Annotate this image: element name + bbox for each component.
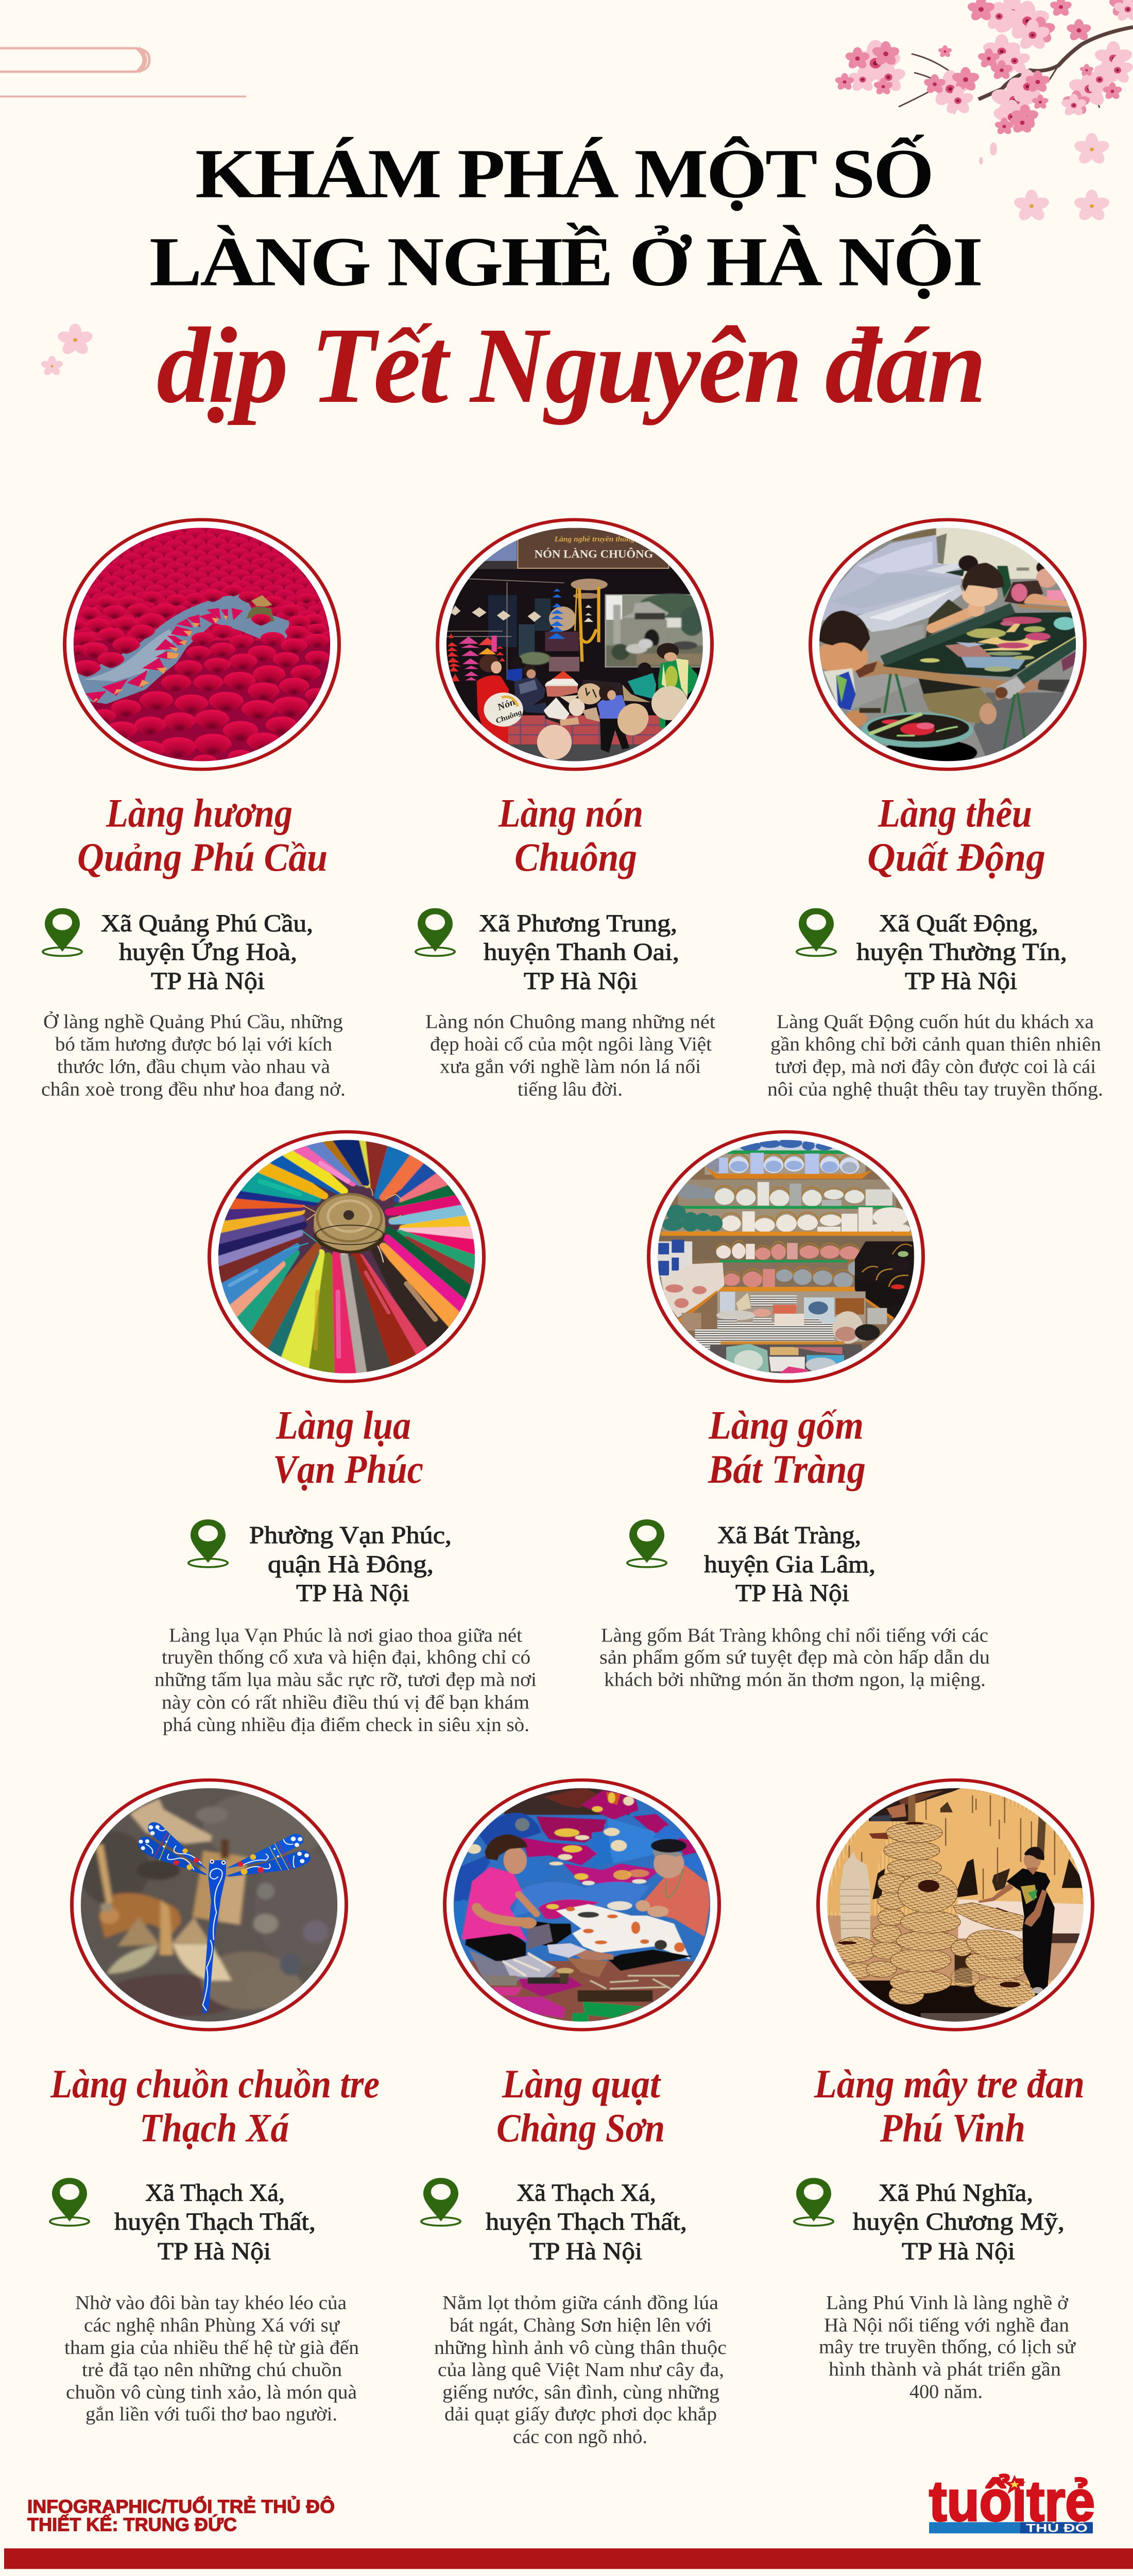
description: Làng lụa Vạn Phúc là nơi giao thoa giữa nét xyxy=(169,1624,522,1646)
icon: location pin xyxy=(627,1519,666,1567)
footer credits: THIẾT KẾ: TRUNG ĐỨC xyxy=(27,2514,237,2535)
address: Xã Thạch Xá, xyxy=(517,2179,656,2206)
description xyxy=(599,1624,990,1690)
description: những hình ảnh vô cùng thân thuộc xyxy=(434,2336,727,2359)
description: khách bởi những món ăn thơm ngon, lạ miệng. xyxy=(604,1668,986,1690)
icon: location pin xyxy=(43,908,82,956)
photo: conical hat shop: Làng nghề truyền thống xyxy=(554,535,635,544)
description: Nằm lọt thỏm giữa cánh đồng lúa xyxy=(442,2292,718,2313)
photo: conical hat shop: Chuông xyxy=(494,708,523,725)
address: TP Hà Nội xyxy=(151,968,265,994)
photo: incense bundles xyxy=(62,517,342,772)
address: Xã Bát Tràng, xyxy=(717,1522,861,1549)
heading xyxy=(498,791,643,879)
address xyxy=(101,910,313,994)
description: gắn liền với tuổi thơ bao người. xyxy=(85,2403,337,2425)
description xyxy=(434,2292,727,2447)
address: TP Hà Nội xyxy=(158,2238,271,2265)
panel: Làng chuồn chuồn tre Thạch Xá xyxy=(50,1777,380,2425)
icon: location pin xyxy=(797,908,836,956)
heading xyxy=(77,791,328,879)
decoration: top-left pill and rule xyxy=(0,48,246,96)
description xyxy=(819,2292,1076,2402)
address xyxy=(704,1522,876,1607)
description: đẹp hoài cổ của một ngôi làng Việt xyxy=(430,1033,712,1055)
footer credits xyxy=(27,2495,335,2535)
address: TP Hà Nội xyxy=(905,968,1017,994)
heading: Bát Tràng xyxy=(708,1447,866,1492)
heading: Làng mây tre đan xyxy=(814,2061,1085,2106)
heading: Chàng Sơn xyxy=(496,2106,665,2150)
description xyxy=(64,2292,359,2425)
address xyxy=(856,910,1067,994)
heading: Phú Vinh xyxy=(880,2106,1025,2150)
address: huyện Thanh Oai, xyxy=(484,939,679,965)
heading xyxy=(867,791,1045,879)
heading: Quất Động xyxy=(867,835,1045,879)
description: mây tre truyền thống, có lịch sử xyxy=(819,2335,1076,2358)
decoration: floating blossoms xyxy=(40,133,1111,377)
description: chuồn vô cùng tinh xảo, là món quà xyxy=(66,2381,357,2403)
address xyxy=(249,1522,452,1607)
address: TP Hà Nội xyxy=(902,2238,1015,2265)
description: Ở làng nghề Quảng Phú Cầu, những xyxy=(43,1010,343,1032)
description: xưa gắn với nghề làm nón lá nổi xyxy=(440,1055,701,1077)
heading: Làng hương xyxy=(106,791,293,836)
heading: Chuông xyxy=(514,835,637,879)
description xyxy=(425,1010,715,1100)
panel: Làng hương Quảng Phú Cầu xyxy=(41,517,346,1100)
address: Xã Quất Động, xyxy=(879,910,1038,937)
heading xyxy=(814,2061,1085,2150)
footer bar xyxy=(4,2548,1133,2569)
address: quận Hà Đông, xyxy=(268,1551,434,1578)
heading: Làng gốm xyxy=(708,1403,864,1448)
logo: Tuổi Trẻ Thủ Đô: tuổitrẻ xyxy=(929,2469,1095,2533)
description: bó tăm hương được bó lại với kích xyxy=(55,1033,332,1055)
description: của làng quê Việt Nam như cây đa, xyxy=(438,2359,724,2380)
description: nôi của nghệ thuật thêu tay truyền thống. xyxy=(767,1078,1103,1100)
description: chân xoè trong đều như hoa đang nở. xyxy=(41,1078,346,1100)
decoration: cherry blossom branch xyxy=(834,0,1133,164)
description: tiếng lâu đời. xyxy=(518,1078,623,1100)
address: huyện Gia Lâm, xyxy=(704,1551,876,1578)
panel: Làng gốm Bát Tràng xyxy=(599,1129,990,1690)
photo: bamboo dragonfly xyxy=(69,1777,349,2032)
heading: Làng quạt xyxy=(502,2061,661,2106)
description xyxy=(154,1624,537,1736)
photo: pottery shelves xyxy=(646,1129,926,1384)
heading: Làng nón xyxy=(498,791,643,836)
address: huyện Thạch Thất, xyxy=(114,2208,316,2235)
address: Xã Phú Nghĩa, xyxy=(879,2179,1033,2206)
description: tham gia của nhiều thế hệ từ già đến xyxy=(64,2336,359,2359)
address xyxy=(479,910,679,994)
address: TP Hà Nội xyxy=(529,2238,642,2265)
photo: colourful silk scarves xyxy=(207,1129,487,1384)
panel: Làng nón Chuông xyxy=(416,517,715,1100)
description: gần không chỉ bởi cảnh quan thiên nhiên xyxy=(770,1033,1101,1055)
heading: Làng chuồn chuồn tre xyxy=(50,2061,380,2106)
photo: conical hat shop xyxy=(435,517,715,772)
description: Làng gốm Bát Tràng không chỉ nổi tiếng với các xyxy=(601,1624,988,1646)
address: huyện Chương Mỹ, xyxy=(853,2208,1065,2235)
description: dải quạt giấy được phơi dọc khắp xyxy=(444,2403,717,2425)
heading: Làng thêu xyxy=(878,791,1032,836)
description: những tấm lụa màu sắc rực rỡ, tươi đẹp mà nơi xyxy=(154,1668,537,1690)
address xyxy=(853,2179,1065,2265)
heading: Làng lụa xyxy=(276,1403,411,1448)
description: tươi đẹp, mà nơi đây còn được coi là cái xyxy=(775,1055,1096,1077)
address xyxy=(114,2179,316,2265)
panel: Làng quạt Chàng Sơn xyxy=(421,1777,727,2447)
description: sản phẩm gốm sứ tuyệt đẹp mà còn hấp dẫn du xyxy=(599,1646,990,1668)
heading: Thạch Xá xyxy=(140,2106,289,2150)
description: Làng Quất Động cuốn hút du khách xa xyxy=(777,1010,1094,1032)
description: Làng Phú Vinh là làng nghề ở xyxy=(826,2292,1069,2313)
description: bát ngát, Chàng Sơn hiện lên với xyxy=(450,2314,712,2336)
description: các nghệ nhân Phùng Xá với sự xyxy=(84,2314,340,2336)
description: trẻ đã tạo nên những chú chuồn xyxy=(82,2359,342,2380)
description: Hà Nội nổi tiếng với nghề đan xyxy=(824,2314,1069,2336)
description: thước lớn, đầu chụm vào nhau và xyxy=(57,1055,330,1077)
icon: location pin xyxy=(416,908,455,956)
footer credits: INFOGRAPHIC/TUỔI TRẺ THỦ ĐÔ xyxy=(27,2495,335,2517)
panel: Làng thêu Quất Động xyxy=(767,517,1103,1100)
title: LÀNG NGHỀ Ở HÀ NỘI xyxy=(149,222,981,301)
description: các con ngõ nhỏ. xyxy=(513,2426,647,2447)
heading xyxy=(496,2061,665,2150)
description xyxy=(767,1010,1103,1100)
title: KHÁM PHÁ MỘT SỐ xyxy=(195,134,932,213)
description: Nhờ vào đôi bàn tay khéo léo của xyxy=(75,2292,347,2313)
address: Xã Quảng Phú Cầu, xyxy=(101,910,313,937)
photo: fan makers xyxy=(442,1777,722,2032)
photo: embroidery frames xyxy=(808,517,1088,772)
photo: rattan baskets xyxy=(815,1777,1095,2034)
photo: conical hat shop: Nón xyxy=(495,697,517,713)
address: TP Hà Nội xyxy=(735,1580,849,1607)
icon: location pin xyxy=(421,2178,460,2226)
heading: Quảng Phú Cầu xyxy=(77,835,328,879)
address: Xã Thạch Xá, xyxy=(145,2179,285,2206)
description: giếng nước, sân đình, cùng những xyxy=(442,2381,719,2403)
address: huyện Thạch Thất, xyxy=(486,2208,687,2235)
address: Xã Phương Trung, xyxy=(479,910,677,937)
description: này còn có rất nhiều điều thú vị để bạn khám xyxy=(162,1691,529,1713)
address: TP Hà Nội xyxy=(524,968,638,994)
icon: location pin xyxy=(188,1519,228,1567)
description: hình thành và phát triển gần xyxy=(829,2358,1061,2380)
logo: Tuổi Trẻ Thủ Đô: THỦ ĐÔ xyxy=(1026,2522,1088,2534)
heading xyxy=(50,2061,380,2150)
photo: conical hat shop: NÓN LÀNG CHUÔNG xyxy=(535,548,653,561)
description: truyền thống cổ xưa và hiện đại, không chỉ có xyxy=(162,1646,530,1668)
description: 400 năm. xyxy=(909,2380,983,2402)
address: TP Hà Nội xyxy=(296,1580,409,1607)
icon: location pin xyxy=(794,2178,833,2226)
panel: Làng mây tre đan Phú Vinh xyxy=(794,1777,1095,2402)
address xyxy=(486,2179,687,2265)
icon: location pin xyxy=(50,2178,89,2226)
heading xyxy=(273,1403,423,1492)
address: huyện Thường Tín, xyxy=(856,939,1067,965)
heading xyxy=(708,1403,866,1492)
address: huyện Ứng Hoà, xyxy=(119,939,297,965)
description: phá cùng nhiều địa điểm check in siêu xịn sò. xyxy=(163,1714,529,1736)
panel: Làng lụa Vạn Phúc xyxy=(154,1129,537,1736)
heading: Vạn Phúc xyxy=(273,1447,423,1492)
title: dịp Tết Nguyên đán xyxy=(157,305,984,426)
description: Làng nón Chuông mang những nét xyxy=(425,1010,715,1032)
title xyxy=(149,134,984,426)
address: Phường Vạn Phúc, xyxy=(249,1522,452,1549)
description xyxy=(41,1010,346,1100)
